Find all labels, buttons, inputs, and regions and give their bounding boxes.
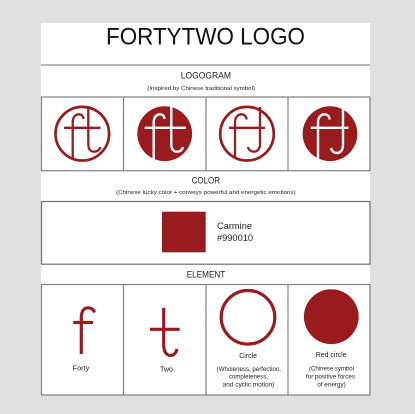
element: red circle description: of energy) xyxy=(317,382,346,388)
element: f glyph xyxy=(73,308,94,354)
subheading: logogram note: (Inspired by Chinese traditional symbol) xyxy=(147,86,255,92)
logo: ft outline xyxy=(56,107,109,160)
panel: element grid xyxy=(42,284,370,395)
color hex: #990010 xyxy=(217,233,253,243)
logo: fj filled xyxy=(303,105,357,162)
color swatch xyxy=(162,212,206,252)
element: red circle xyxy=(304,289,359,344)
element: circle xyxy=(221,290,275,344)
white sheet xyxy=(41,23,370,395)
panel: logogram grid xyxy=(42,97,370,171)
element: red circle description: for positive forces xyxy=(306,375,355,381)
panel: color xyxy=(42,202,370,264)
subheading: color note: (Chinese lucky color + conveys powerful and energetic emotions) xyxy=(116,190,296,196)
heading: element: ELEMENT xyxy=(187,269,225,280)
heading: color: COLOR xyxy=(192,175,220,186)
heading: logogram: LOGOGRAM xyxy=(181,70,231,81)
element: red circle description: (Chinese symbol xyxy=(309,367,354,373)
color name: Carmine xyxy=(217,221,252,231)
element: red circle description xyxy=(306,367,355,388)
logo: ft filled xyxy=(137,105,192,162)
element: circle description: and cyclic motion) xyxy=(223,383,274,389)
element: circle label: Circle xyxy=(239,353,257,360)
element: circle description: (Wholeness, perfection, xyxy=(217,367,281,373)
logo: fj outline xyxy=(220,107,274,160)
element: t glyph xyxy=(150,308,180,356)
element: f label: Forty xyxy=(73,366,90,373)
element: circle description xyxy=(217,367,281,389)
element: red circle label: Red circle xyxy=(316,352,347,359)
element: t label: Two xyxy=(160,366,173,373)
title: FORTYTWO LOGO xyxy=(106,23,305,50)
element: circle description: completeness, xyxy=(229,375,268,381)
